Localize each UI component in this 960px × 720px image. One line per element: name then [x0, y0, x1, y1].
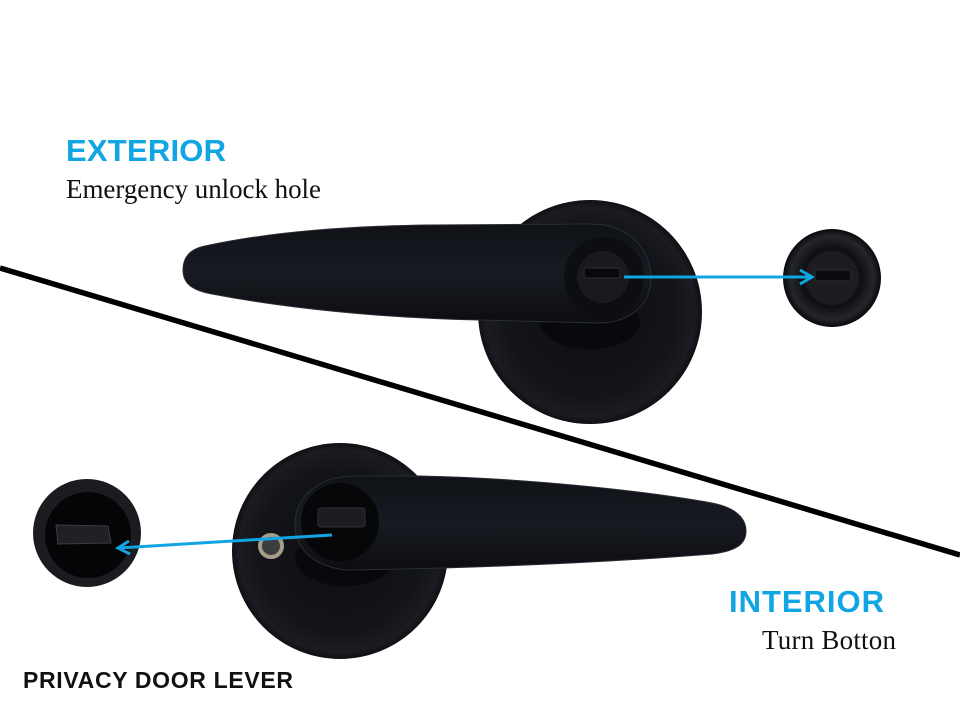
- interior detail circle: [33, 479, 141, 587]
- exterior detail circle: [783, 229, 881, 327]
- interior detail body: [33, 479, 141, 587]
- exterior slot: [584, 268, 620, 278]
- exterior button: [577, 251, 629, 303]
- title: privacy door lever: PRIVACY DOOR LEVER: [23, 667, 293, 693]
- arrow: interior: [118, 535, 332, 554]
- exterior rose plate: [478, 200, 702, 424]
- interior recess: [301, 483, 379, 561]
- interior lever arm: [295, 476, 746, 570]
- heading: exterior: EXTERIOR: [66, 133, 226, 168]
- interior emergency hole: [260, 535, 282, 557]
- exterior lever stem: [540, 295, 640, 349]
- text: emergency unlock hole: Emergency unlock hole: [66, 174, 321, 204]
- interior detail button: [56, 525, 111, 544]
- exterior lever handle photo: [183, 200, 702, 424]
- exterior detail body: [783, 229, 881, 327]
- divider line: [0, 268, 960, 555]
- exterior lever arm: [183, 224, 651, 323]
- interior lever stem: [295, 530, 395, 586]
- interior detail well: [45, 492, 131, 578]
- exterior detail slot: [815, 270, 851, 281]
- arrow: exterior: [624, 270, 812, 284]
- interior lever handle photo: [232, 443, 746, 659]
- interior rose plate: [232, 443, 448, 659]
- interior turn button: [318, 508, 365, 527]
- exterior recess: [564, 237, 644, 317]
- exterior detail dome: [805, 251, 859, 305]
- heading: interior: INTERIOR: [729, 584, 884, 619]
- text: turn botton: Turn Botton: [762, 625, 896, 655]
